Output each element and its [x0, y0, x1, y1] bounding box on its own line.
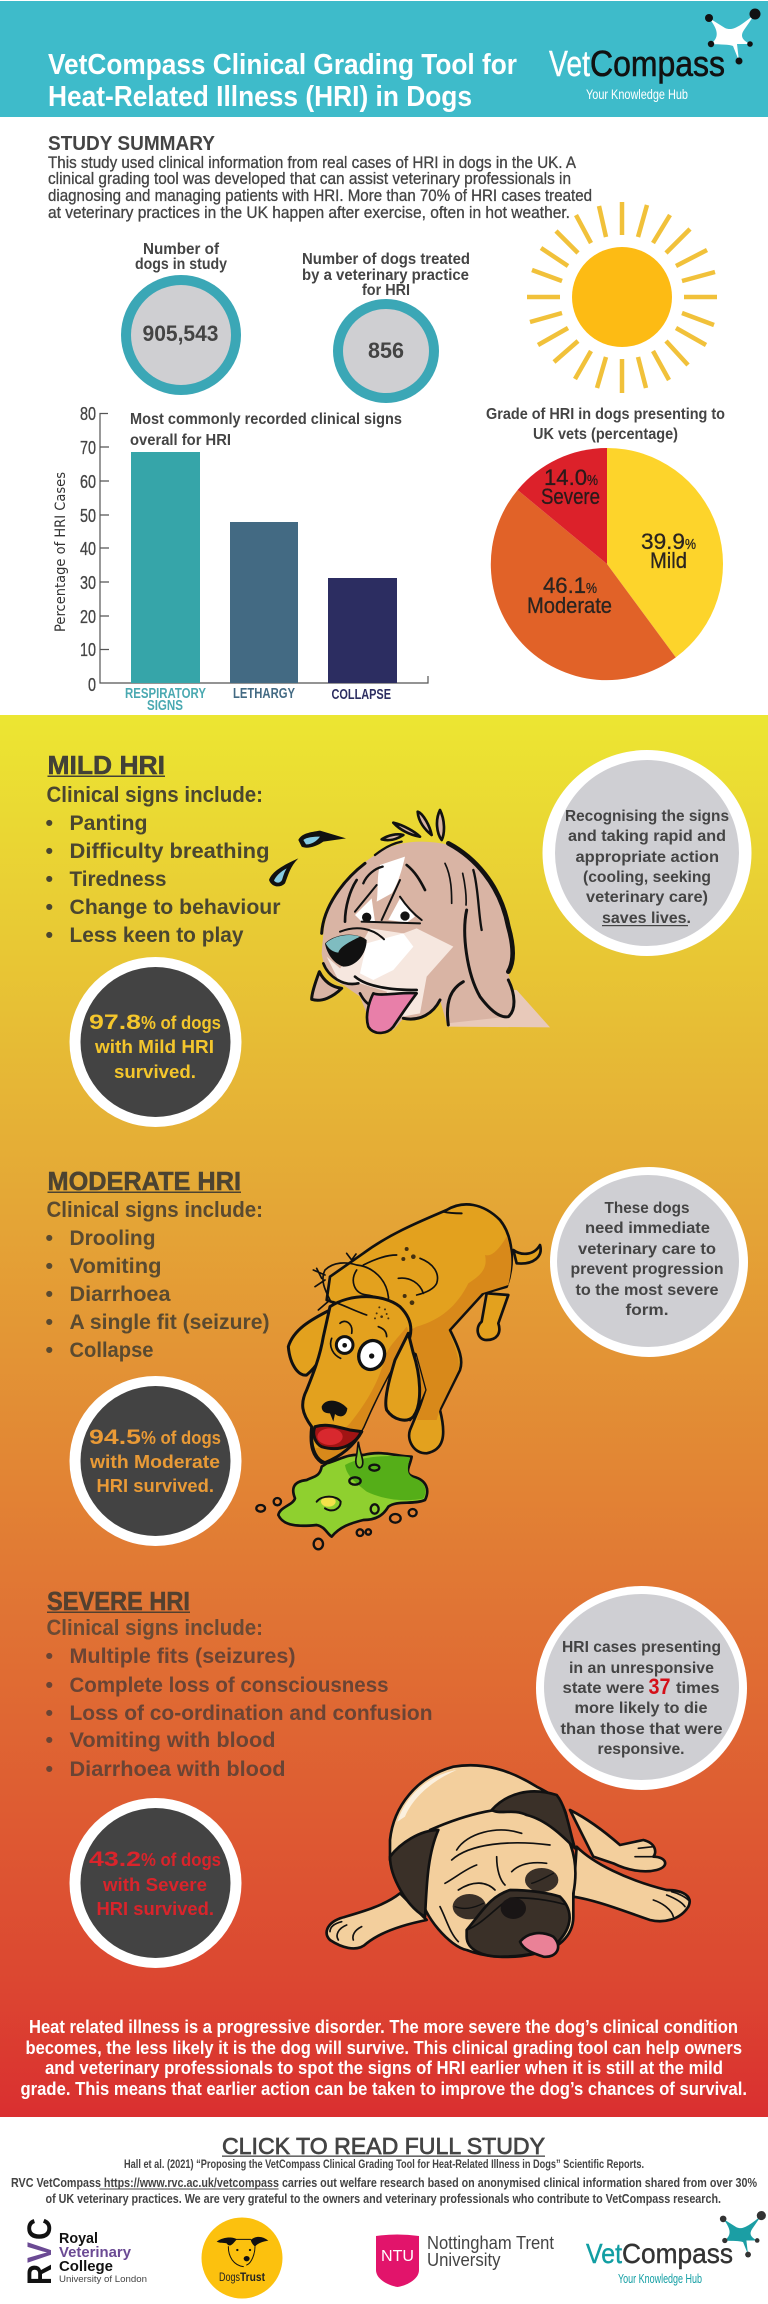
- back leg: [570, 1810, 665, 1871]
- logo: Nottingham Trent University: NTU: [381, 2248, 414, 2265]
- body shade: [392, 1237, 511, 1420]
- moderate signs list: A single fit (seizure): [70, 1310, 270, 1334]
- severe survival callout: % of dogs: [141, 1849, 221, 1870]
- severe risk callout: state were: [562, 1680, 645, 1697]
- moderate signs list: •: [46, 1338, 53, 1362]
- logo: VetCompass white: Compass: [590, 43, 725, 84]
- illustration: vomiting dog: [256, 1204, 541, 1549]
- stars around head: [313, 1253, 356, 1287]
- moderate survival callout: [70, 1376, 242, 1546]
- chart title: [130, 411, 402, 449]
- bar: respiratory signs: RESPIRATORY: [125, 686, 206, 702]
- study summary text: This study used clinical information from real cases of HRI in dogs in the UK. A: [48, 154, 576, 172]
- severe risk callout: responsive.: [598, 1741, 684, 1758]
- stat: number of dogs treated for HRI: Number of dogs treated: [302, 251, 470, 268]
- logo: Royal Veterinary College: V: [21, 2242, 59, 2263]
- mild advice callout: and taking rapid and: [568, 828, 726, 845]
- moderate advice callout: need immediate: [585, 1220, 710, 1237]
- logo: VetCompass white: Vet: [549, 43, 590, 84]
- moderate advice callout: prevent progression: [570, 1261, 724, 1278]
- pale patches: [377, 857, 405, 902]
- mild heading: MILD HRI: [48, 752, 165, 780]
- mild advice callout: veterinary care): [586, 889, 708, 906]
- right front leg: [573, 1847, 690, 1921]
- y axis labels: 60: [80, 472, 96, 492]
- mild survival callout: 97.8: [89, 1011, 141, 1034]
- logo: Dogs Trust: [202, 2218, 282, 2298]
- logo: Royal Veterinary College: C: [21, 2218, 59, 2240]
- logo: VetCompass white: [549, 8, 760, 102]
- title: Heat-Related Illness (HRI) in Dogs: [48, 81, 472, 113]
- severe signs list: Clinical signs include:: [46, 1615, 263, 1640]
- muzzle, lower ear and mouth: [312, 972, 342, 1000]
- logo: Royal Veterinary College: [21, 2218, 147, 2285]
- slice: severe: 14.0: [544, 465, 587, 490]
- face marks: [331, 1302, 387, 1358]
- slice: moderate: Moderate: [527, 593, 612, 618]
- moderate advice callout: These dogs: [604, 1200, 690, 1217]
- moderate advice callout: to the most severe: [576, 1282, 719, 1299]
- logo: Royal Veterinary College: Veterinary: [59, 2245, 131, 2261]
- severe survival callout: [70, 1798, 242, 1968]
- severe risk callout: more likely to die: [574, 1700, 708, 1717]
- slice: severe: %: [587, 472, 598, 489]
- tongue: [367, 993, 417, 1033]
- study summary text: [48, 154, 592, 222]
- forehead wrinkles: [440, 1830, 550, 1942]
- severe risk callout: 37: [648, 1674, 670, 1699]
- axes: [100, 414, 428, 683]
- slice: severe: Severe: [541, 484, 600, 509]
- moderate survival callout: % of dogs: [141, 1427, 221, 1448]
- right ear: [492, 1791, 575, 1848]
- moderate signs list: [46, 1197, 270, 1362]
- logo: Royal Veterinary College: University of London: [59, 2274, 147, 2285]
- bar: lethargy: [230, 522, 298, 702]
- body: [327, 1204, 512, 1453]
- bar: collapse: [328, 578, 397, 703]
- moderate survival callout: HRI survived.: [96, 1475, 214, 1496]
- logo: Royal Veterinary College: Royal: [59, 2231, 98, 2247]
- stat: number of dogs treated for HRI: for HRI: [362, 282, 410, 299]
- mouth: [312, 1425, 362, 1463]
- slice: mild: [607, 448, 723, 657]
- tail: [513, 1245, 541, 1264]
- slice: mild: 39.9: [641, 529, 685, 554]
- chart title: overall for HRI: [130, 432, 231, 449]
- moderate advice callout: [550, 1167, 748, 1357]
- logo: VetCompass colour: Vet: [586, 2238, 622, 2269]
- nose: [322, 1401, 347, 1422]
- back leg: [478, 1293, 508, 1340]
- mild survival callout: % of dogs: [141, 1012, 221, 1033]
- eye patches: [453, 1868, 558, 1919]
- mild advice callout: appropriate action: [576, 849, 719, 866]
- icon: sun: [527, 202, 717, 393]
- logo: Royal Veterinary College: R: [21, 2264, 59, 2285]
- drool: [356, 1442, 363, 1468]
- ink lines: [322, 842, 514, 1025]
- moderate survival callout: 94.5: [89, 1426, 141, 1449]
- stat: number of dogs in study: dogs in study: [135, 256, 227, 273]
- mild signs list: •: [46, 811, 53, 835]
- call to action heading: CLICK TO READ FULL STUDY: [222, 2133, 545, 2159]
- mild advice callout: Recognising the signs: [565, 808, 729, 825]
- conclusion text: [20, 2016, 747, 2099]
- severe signs list: Complete loss of consciousness: [70, 1673, 389, 1697]
- muzzle: [467, 1890, 570, 1957]
- mild signs list: •: [46, 895, 53, 919]
- mild signs list: Change to behaviour: [70, 895, 281, 919]
- section: moderate HRI: [46, 1167, 748, 1549]
- bar: collapse: COLLAPSE: [332, 687, 391, 703]
- left ear: [390, 1830, 438, 1917]
- severe risk callout: HRI cases presenting: [562, 1639, 721, 1656]
- bar: lethargy: LETHARGY: [233, 686, 295, 702]
- section: mild HRI: [46, 750, 752, 1127]
- severe signs list: Multiple fits (seizures): [70, 1644, 296, 1668]
- citation: Hall et al. (2021) “Proposing the VetCompass Clinical Grading Tool for Heat-Related Illness in Dogs” Scientific Reports.: [124, 2159, 644, 2171]
- moderate signs list: •: [46, 1310, 53, 1334]
- nose: [325, 928, 384, 967]
- chart title: Most commonly recorded clinical signs: [130, 411, 402, 428]
- severe risk callout: than those that were: [560, 1721, 723, 1738]
- stat: number of dogs treated for HRI: 856: [368, 338, 404, 363]
- moderate signs list: •: [46, 1282, 53, 1306]
- toes: [330, 1847, 688, 1940]
- body: [390, 1765, 567, 1860]
- severe risk callout: times: [676, 1680, 720, 1697]
- left ear: [288, 1310, 330, 1375]
- right ear: [386, 1333, 420, 1420]
- stat: number of dogs in study: [121, 241, 241, 395]
- mild signs list: [46, 782, 281, 947]
- illustration: collapsed pug: [327, 1765, 690, 1957]
- moderate advice callout: form.: [626, 1302, 668, 1319]
- moderate advice callout: veterinary care to: [578, 1241, 716, 1258]
- moderate signs list: Collapse: [70, 1338, 154, 1362]
- mild advice callout: [542, 750, 752, 956]
- bar chart: clinical signs: [53, 404, 428, 714]
- mild survival callout: survived.: [114, 1061, 196, 1082]
- logo: VetCompass white: Your Knowledge Hub: [586, 86, 688, 102]
- study summary text: diagnosing and managing patients with HRI. More than 70% of HRI cases treated: [48, 187, 592, 205]
- moderate signs list: •: [46, 1254, 53, 1278]
- eyes: [355, 880, 422, 923]
- header banner: [0, 1, 768, 117]
- moderate signs list: Drooling: [70, 1226, 156, 1250]
- y axis labels: [80, 404, 96, 695]
- left front leg: [327, 1893, 427, 1948]
- slice: severe: [518, 448, 607, 564]
- pie chart: grade of HRI: [486, 406, 725, 680]
- y axis labels: 70: [80, 438, 96, 458]
- mild advice callout: saves lives.: [602, 910, 691, 927]
- mild signs list: Less keen to play: [70, 923, 244, 947]
- severe signs list: •: [46, 1701, 53, 1725]
- eyes: [336, 1337, 389, 1373]
- mild signs list: •: [46, 867, 53, 891]
- severe signs list: Vomiting with blood: [70, 1728, 276, 1752]
- sweat drops: [269, 831, 346, 886]
- pie title: [486, 406, 725, 443]
- y axis labels: 10: [80, 640, 96, 660]
- logo: Nottingham Trent University: University: [427, 2250, 500, 2270]
- severe signs list: •: [46, 1644, 53, 1668]
- y axis labels: 30: [80, 573, 96, 593]
- slice: moderate: %: [586, 580, 597, 597]
- logo: VetCompass colour: [586, 2211, 766, 2286]
- y axis labels: 0: [88, 675, 96, 695]
- mild signs list: Clinical signs include:: [46, 782, 263, 807]
- slice: mild: %: [685, 536, 696, 553]
- stat: number of dogs in study: 905,543: [142, 321, 218, 346]
- mild survival callout: with Mild HRI: [94, 1036, 214, 1057]
- moderate heading: MODERATE HRI: [48, 1168, 241, 1196]
- mild survival callout: [70, 957, 242, 1127]
- head: [420, 1808, 575, 1957]
- vomit puddle: [256, 1453, 427, 1549]
- study summary text: at veterinary practices in the UK happen after exercise, often in hot weather.: [48, 204, 570, 222]
- far front leg: [393, 1353, 431, 1420]
- study summary heading: STUDY SUMMARY: [48, 133, 216, 155]
- severe heading: SEVERE HRI: [47, 1588, 190, 1616]
- severe signs list: Loss of co-ordination and confusion: [70, 1701, 432, 1725]
- acknowledgement text: [11, 2175, 757, 2206]
- title: [48, 49, 517, 113]
- bar: respiratory signs: [125, 452, 206, 714]
- mild signs list: Difficulty breathing: [70, 839, 270, 863]
- logo: Nottingham Trent University: [376, 2233, 554, 2287]
- logo: Royal Veterinary College: College: [59, 2259, 113, 2275]
- moderate signs list: •: [46, 1226, 53, 1250]
- stat: number of dogs treated for HRI: by a veterinary practice: [302, 267, 469, 284]
- y axis labels: 50: [80, 506, 96, 526]
- pie title: UK vets (percentage): [533, 426, 678, 443]
- severe survival callout: HRI survived.: [96, 1898, 214, 1919]
- study summary text: clinical grading tool was developed that can assist veterinary professionals in: [48, 170, 571, 188]
- y axis labels: 20: [80, 607, 96, 627]
- head: [303, 1297, 411, 1463]
- mild signs list: •: [46, 839, 53, 863]
- mild advice callout: (cooling, seeking: [583, 869, 711, 886]
- mild signs list: •: [46, 923, 53, 947]
- logo: VetCompass colour: Compass: [622, 2238, 733, 2269]
- severe signs list: •: [46, 1757, 53, 1781]
- neck and body: [447, 987, 550, 1027]
- logo: VetCompass colour: Your Knowledge Hub: [618, 2272, 702, 2286]
- severe survival callout: with Severe: [102, 1874, 207, 1895]
- slice: moderate: [491, 490, 676, 680]
- moderate signs list: Clinical signs include:: [46, 1197, 263, 1222]
- bar: respiratory signs: SIGNS: [147, 698, 183, 714]
- moderate survival callout: with Moderate: [89, 1451, 220, 1472]
- severe survival callout: 43.2: [89, 1848, 141, 1871]
- y axis labels: 80: [80, 404, 96, 424]
- stat: number of dogs in study: Number of: [143, 241, 220, 258]
- logo: Dogs Trust: Trust: [240, 2270, 265, 2284]
- y axis title: Percentage of HRI Cases: [53, 472, 69, 632]
- severe signs list: •: [46, 1728, 53, 1752]
- title: VetCompass Clinical Grading Tool for: [48, 49, 517, 81]
- moderate signs list: Vomiting: [70, 1254, 162, 1278]
- severe risk callout: in an unresponsive: [569, 1660, 714, 1677]
- hair tufts: [382, 810, 444, 840]
- y axis labels: 40: [80, 539, 96, 559]
- illustration: panting dog: [269, 810, 550, 1033]
- severe risk callout: [536, 1586, 747, 1790]
- severe signs list: •: [46, 1673, 53, 1697]
- body ink: [318, 1212, 462, 1310]
- nose: [501, 1898, 526, 1919]
- slice: moderate: 46.1: [543, 573, 586, 598]
- severe signs list: Diarrhoea with blood: [70, 1757, 286, 1781]
- mild signs list: Panting: [70, 811, 148, 835]
- tongue: [520, 1933, 558, 1957]
- slice: mild: Mild: [650, 548, 687, 573]
- severe signs list: [46, 1615, 432, 1781]
- logo: Nottingham Trent University: Nottingham Trent: [427, 2233, 554, 2253]
- pie title: Grade of HRI in dogs presenting to: [486, 406, 725, 423]
- mild signs list: Tiredness: [70, 867, 167, 891]
- logo: Dogs Trust: Dogs: [219, 2270, 240, 2284]
- stat: number of dogs treated for HRI: [302, 251, 470, 403]
- section: severe HRI: [46, 1586, 747, 1968]
- moderate signs list: Diarrhoea: [70, 1282, 172, 1306]
- heat gradient panel: [0, 715, 768, 2117]
